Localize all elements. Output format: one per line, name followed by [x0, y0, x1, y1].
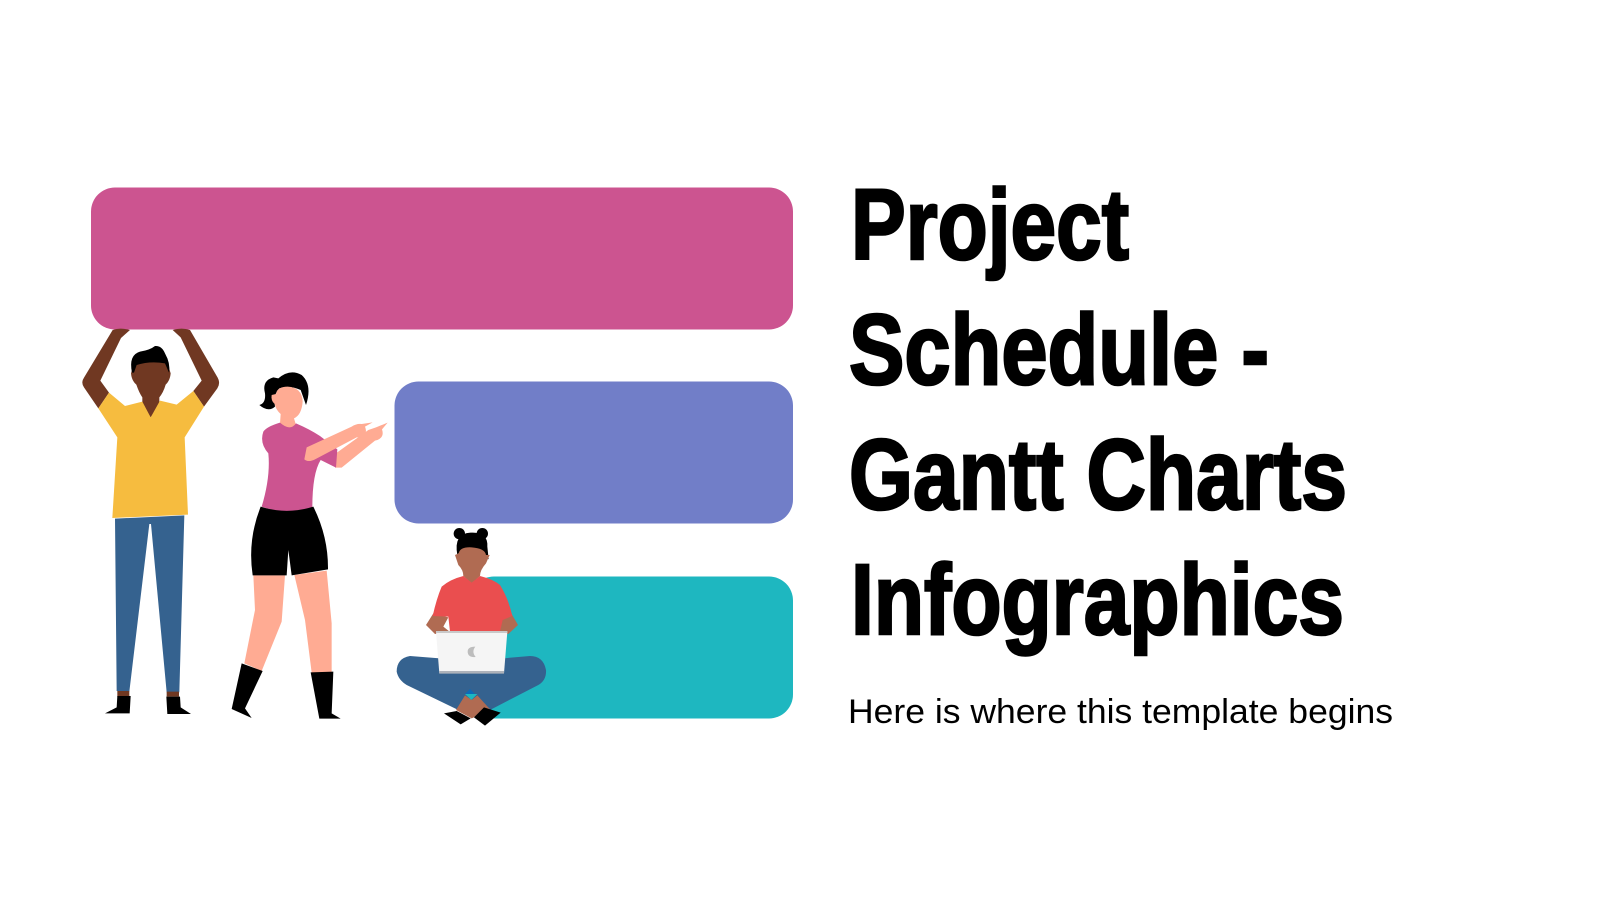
title: [849, 169, 1347, 656]
subtitle: Here is where this template begins: [848, 693, 1393, 731]
title: Gantt Charts: [849, 419, 1347, 531]
icon: seated woman with laptop: [397, 528, 546, 726]
panel: teal bar: [470, 576, 793, 718]
panel: blue bar: [394, 382, 793, 524]
panel: pink bar: [91, 188, 793, 330]
title: Project: [851, 169, 1129, 281]
icon: man holding up the pink bar: [82, 329, 219, 714]
title: Infographics: [851, 544, 1344, 656]
title: Schedule -: [849, 294, 1269, 406]
icon: woman pointing at the blue bar: [232, 372, 388, 719]
